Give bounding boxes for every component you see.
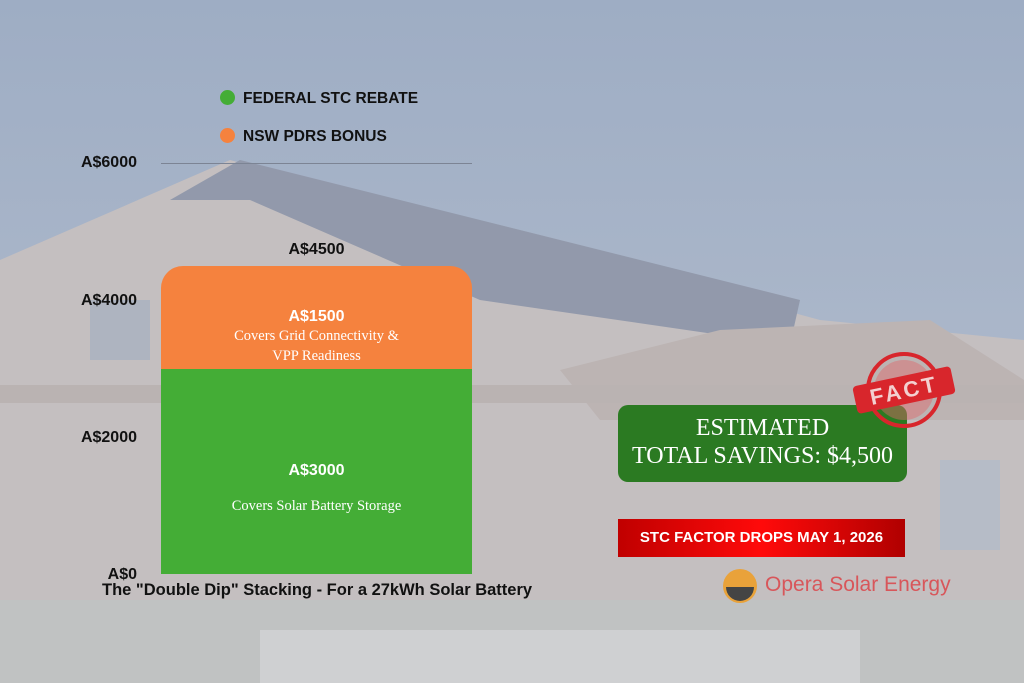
- chart caption: The "Double Dip" Stacking - For a 27kWh Solar Battery: [102, 581, 532, 599]
- icon: FACT stamp: FACT: [868, 371, 941, 410]
- legend: FEDERAL STC REBATE: [243, 90, 418, 107]
- segment: NSW PDRS: VPP Readiness: [272, 348, 361, 364]
- legend: NSW PDRS BONUS: [243, 128, 387, 145]
- segment: NSW PDRS: Covers Grid Connectivity &: [234, 328, 399, 344]
- segment: Federal STC: A$3000: [288, 462, 345, 479]
- bar total label: A$4500: [288, 241, 345, 258]
- savings box: ESTIMATED: [696, 415, 829, 441]
- text: A$6000: [81, 154, 137, 171]
- legend: [220, 90, 418, 145]
- segment: NSW PDRS: A$1500: [288, 308, 345, 325]
- axis labels: [81, 154, 137, 583]
- segment: NSW PDRS: [161, 266, 472, 369]
- savings box: TOTAL SAVINGS: $4,500: [632, 443, 893, 469]
- deadline banner: [618, 519, 905, 557]
- logo: [723, 569, 951, 603]
- deadline banner: STC FACTOR DROPS MAY 1, 2026: [640, 529, 883, 546]
- logo: Opera Solar Energy: [765, 573, 951, 596]
- savings box: [618, 405, 907, 482]
- text: A$4000: [81, 292, 137, 309]
- stacked bar: [161, 266, 472, 574]
- segment: Federal STC: Covers Solar Battery Storage: [232, 498, 401, 514]
- text: A$2000: [81, 429, 137, 446]
- icon: FACT stamp: [852, 352, 956, 428]
- icon: sun panel: [723, 569, 757, 603]
- text: A$0: [108, 566, 137, 583]
- segment: Federal STC: [161, 369, 472, 574]
